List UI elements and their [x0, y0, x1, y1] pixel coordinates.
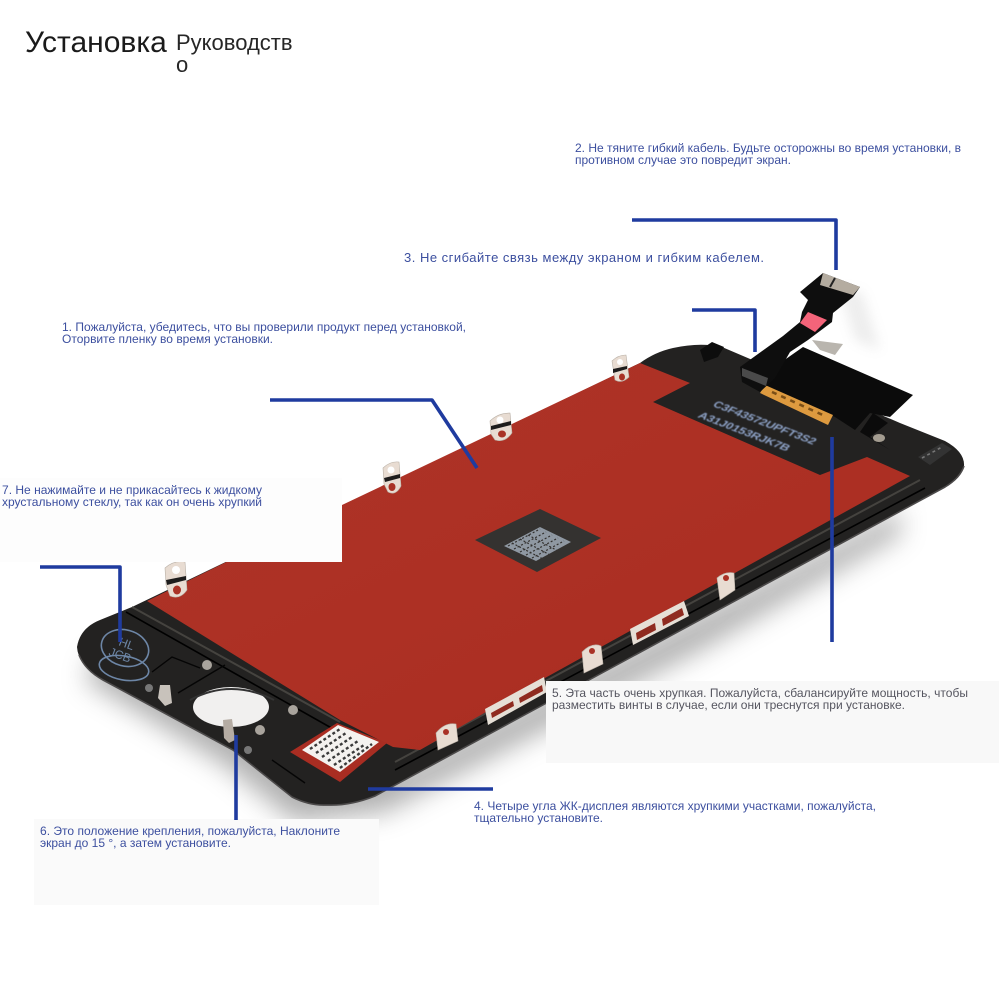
- callout 1 text: 1. Пожалуйста, убедитесь, что вы проверили продукт перед установкой,: [62, 320, 466, 334]
- inner frame rail: [132, 480, 920, 762]
- leader line 3: [692, 310, 755, 352]
- illustration: LCD screen assembly: [77, 273, 964, 822]
- callout 6 text: 6. Это положение крепления, пожалуйста, Наклоните: [40, 824, 340, 838]
- bottom mounting tabs: [436, 573, 735, 750]
- callout 7 text: хрустальному стеклу, так как он очень хрупкий: [2, 495, 262, 509]
- flex cable shadow: [840, 290, 880, 350]
- callout 3 text: 3. Не сгибайте связь между экраном и гибким кабелем.: [404, 250, 764, 265]
- barcode sticker: [290, 723, 387, 782]
- callout 1 text: [62, 320, 466, 346]
- title: Установка: [25, 26, 167, 59]
- text box background: note 6: [34, 819, 379, 905]
- callout 6 text: [40, 824, 340, 850]
- callout 7 text: 7. Не нажимайте и не прикасайтесь к жидкому: [2, 483, 262, 497]
- callout 4 text: 4. Четыре угла ЖК-дисплея являются хрупкими участками, пожалуйста,: [474, 799, 876, 813]
- leader line 7: [40, 567, 120, 642]
- printed text on film label: C3F43572UPFT3S2: [710, 400, 819, 447]
- blue logo stamp: [97, 624, 153, 684]
- callout 2 text: 2. Не тяните гибкий кабель. Будьте осторожны во время установки, в: [575, 141, 961, 155]
- callout 6 text: экран до 15 °, а затем установите.: [40, 836, 231, 850]
- callout 5 text: разместить винты в случае, если они треснутся при установке.: [552, 698, 905, 712]
- leader line 5: [830, 437, 834, 642]
- text box background: note 5: [546, 681, 999, 763]
- text box background: note 7: [0, 478, 342, 562]
- blue logo stamp: HL: [117, 635, 136, 653]
- earpiece and top details: [700, 342, 952, 465]
- mounting screw: [873, 434, 885, 442]
- callout 2 text: противном случае это повредит экран.: [575, 153, 791, 167]
- leader line 2: [632, 220, 836, 270]
- leader line 4: [368, 787, 493, 791]
- callout 2 text: [575, 141, 961, 167]
- home button hole: [145, 657, 305, 783]
- callout 4 text: [474, 799, 876, 825]
- callout 5 text: [552, 686, 968, 712]
- frame highlight edge: [79, 466, 964, 805]
- red film: [147, 363, 910, 750]
- drop shadow: [85, 510, 900, 822]
- top mounting tabs: [165, 355, 629, 597]
- callout 5 text: 5. Эта часть очень хрупкая. Пожалуйста, сбалансируйте мощность, чтобы: [552, 686, 968, 700]
- leader line 6: [234, 735, 238, 820]
- leader line 1: [270, 400, 477, 468]
- callout 1 text: Оторвите пленку во время установки.: [62, 332, 273, 346]
- title: о: [176, 52, 188, 77]
- centre QR patch: [475, 509, 601, 572]
- printed text on film label: A31J0153RJK7B: [695, 411, 793, 454]
- title: [25, 26, 293, 77]
- black frame: [77, 345, 964, 805]
- callout 7 text: [2, 483, 262, 509]
- flex cable: [740, 273, 913, 450]
- title: Руководств: [176, 30, 293, 55]
- printed text on film label: [695, 400, 819, 454]
- blue logo stamp: JCB: [107, 645, 133, 666]
- callout 4 text: тщательно установите.: [474, 811, 603, 825]
